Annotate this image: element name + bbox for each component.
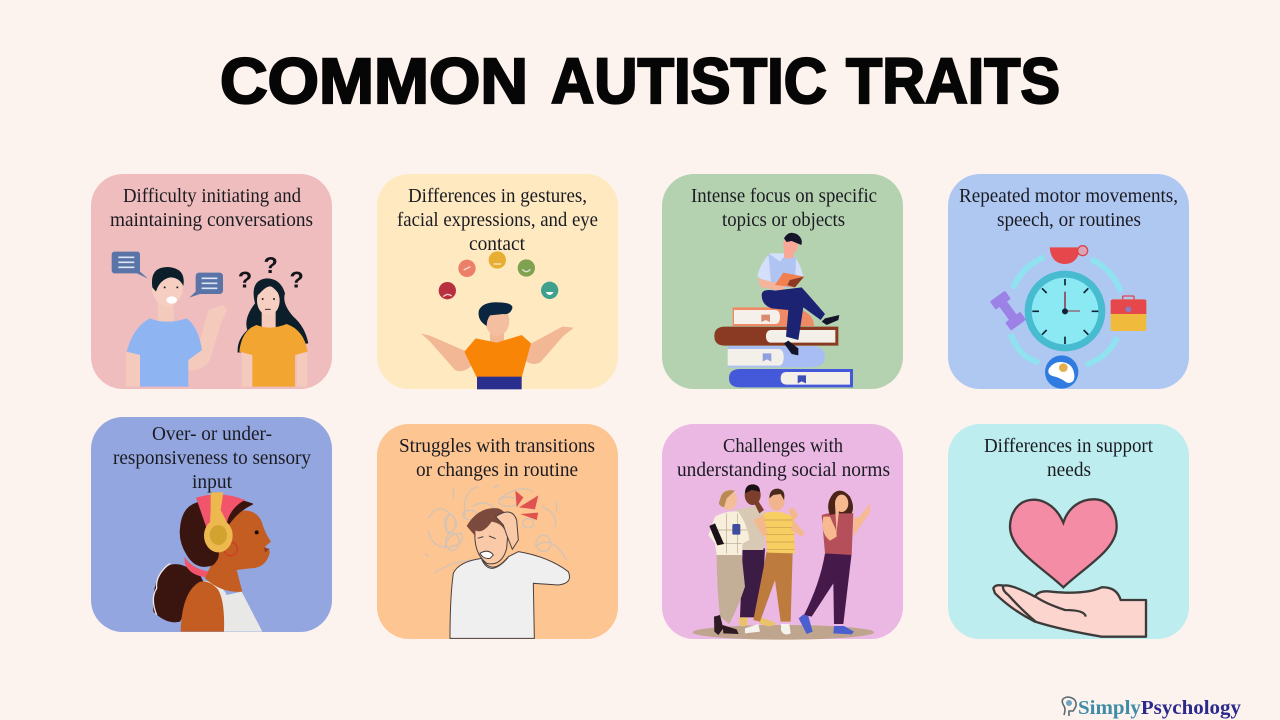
panel text: social norms: understanding social norms [677, 460, 890, 481]
panel: difficulty initiating conversations [91, 174, 332, 389]
panel text: routines: Repeated motor movements, [959, 186, 1178, 207]
panel text: sensory: Over- or under- [152, 424, 272, 445]
title: COMMON [220, 45, 528, 117]
icon: heart above open hand [993, 499, 1146, 637]
panel text: transitions: Struggles with transitions [399, 436, 595, 457]
panel: support needs [948, 424, 1189, 639]
panel: repeated movements and routines [948, 174, 1189, 389]
panel: sensory responsiveness [91, 417, 332, 632]
icon: person reading on stacked books [714, 233, 853, 387]
title: TRAITS [846, 45, 1060, 117]
logo wordmark: SimplyPsychology [1078, 697, 1241, 719]
panel: differences in gestures [377, 174, 618, 389]
title [220, 45, 1060, 117]
panel text: social norms: Challenges with [723, 436, 843, 457]
panel text: conversations: maintaining conversations [110, 210, 313, 231]
icon: two people talking with speech bubbles and question marks [112, 252, 308, 387]
panel text: focus: topics or objects [722, 210, 845, 231]
panel text: gestures: contact [469, 234, 526, 255]
panel: intense focus [662, 174, 903, 389]
icon: two people talking with speech bubbles and question marks: ? [290, 266, 304, 292]
panel text: conversations: Difficulty initiating and [123, 186, 301, 207]
icon: two people talking with speech bubbles and question marks: ? [238, 266, 252, 292]
icon: clock with daily routine items [990, 246, 1146, 389]
panel text: gestures: Differences in gestures, [408, 186, 587, 207]
icon: group of friends with one person walking away [693, 484, 874, 640]
icon: two people talking with speech bubbles and question marks: ? [264, 252, 278, 278]
panel text: focus: Intense focus on specific [691, 186, 877, 207]
panel text: transitions: or changes in routine [416, 460, 578, 481]
panel text: support needs: needs [1047, 460, 1091, 481]
panel text: sensory: responsiveness to sensory [113, 448, 311, 469]
icon: woman wearing headphones [153, 492, 271, 632]
logo: Simply Psychology [1062, 697, 1241, 719]
panel: social norms [662, 424, 903, 640]
panel: transitions [377, 424, 618, 639]
panel text: routines: speech, or routines [997, 210, 1141, 231]
icon: person juggling emotion faces [421, 251, 574, 389]
icon: head with brain [1062, 697, 1076, 716]
panel text: support needs: Differences in support [984, 436, 1154, 457]
panel text: gestures: facial expressions, and eye [397, 210, 598, 231]
icon: stressed man holding his head [425, 485, 570, 638]
panel text: sensory: input [192, 472, 233, 493]
title: AUTISTIC [551, 45, 827, 117]
